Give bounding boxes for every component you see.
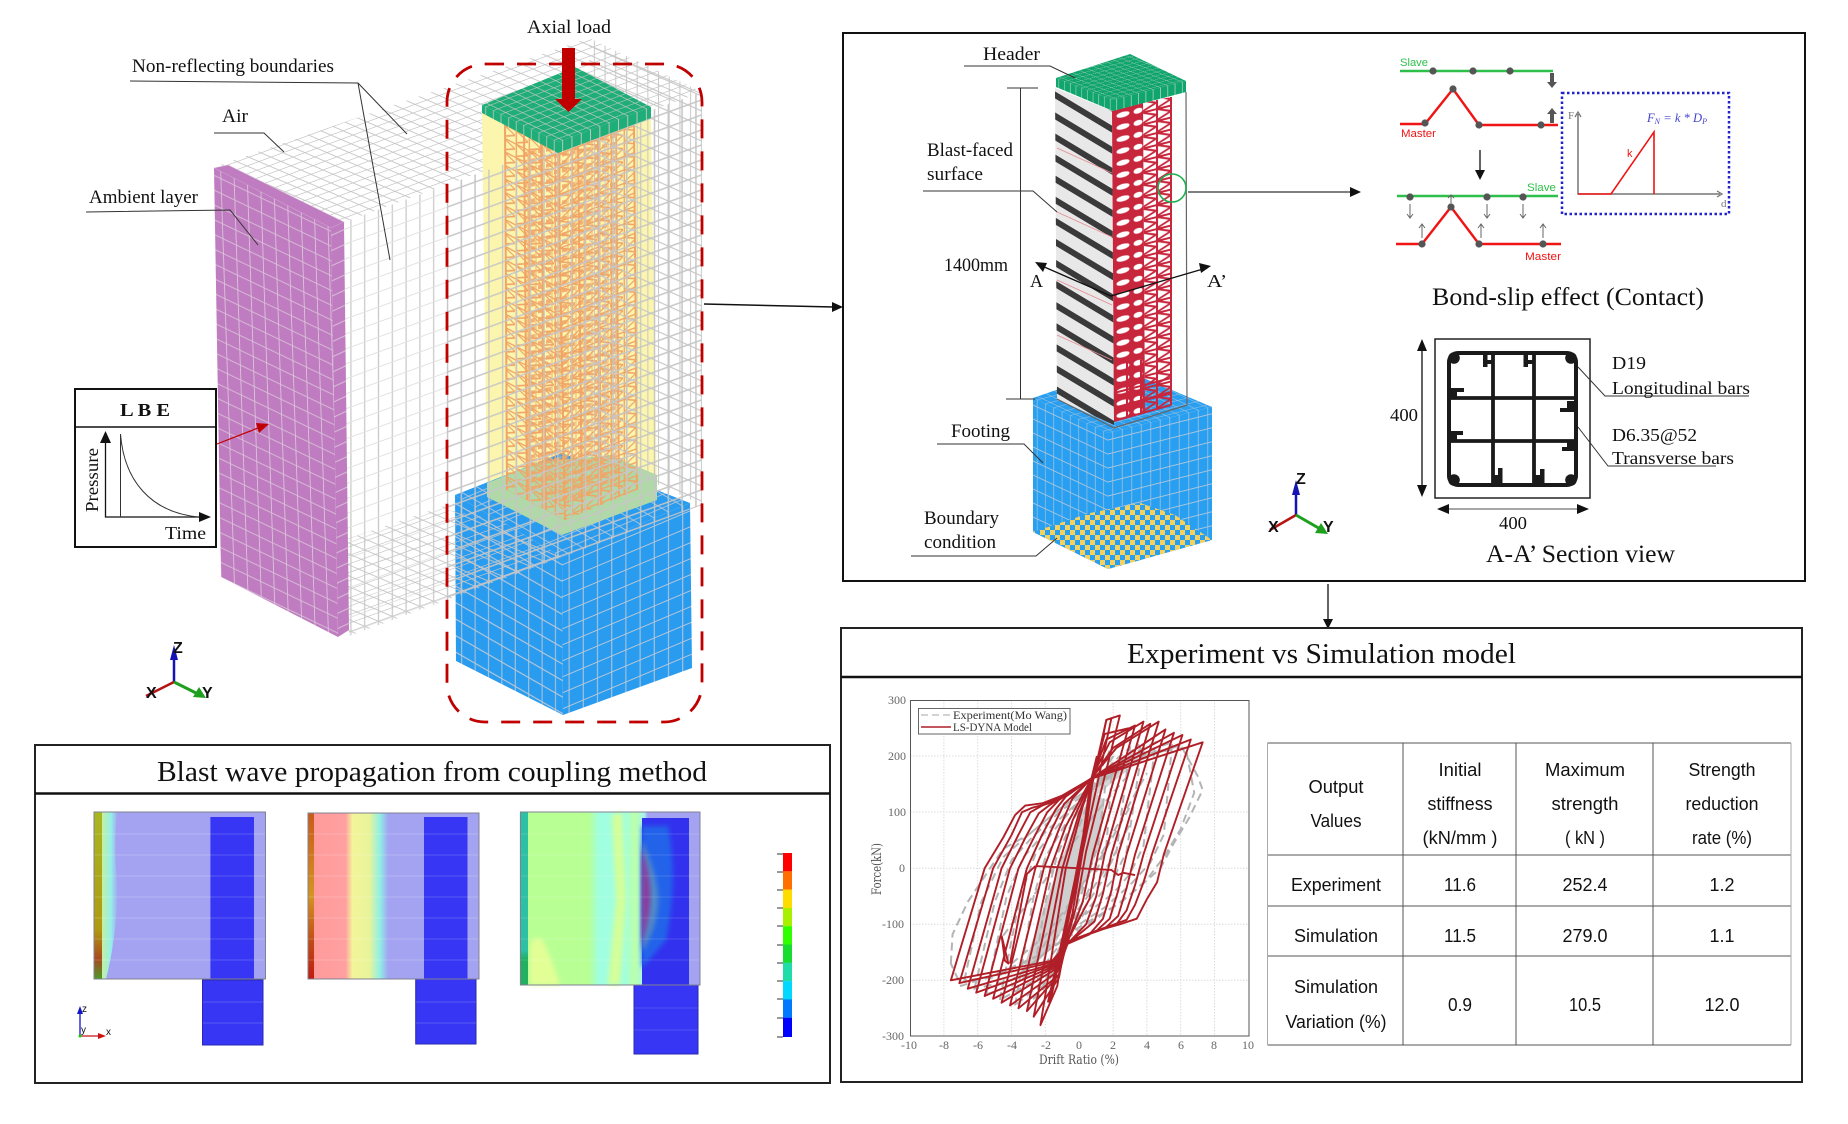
header: output values: Output xyxy=(1308,777,1364,797)
axis triad left xyxy=(146,640,213,702)
label: non-reflecting boundaries: Non-reflecting boundaries xyxy=(132,56,334,77)
heading: bond-slip effect: Bond-slip effect (Contact) xyxy=(1432,284,1704,311)
header: maximum strength: ( kN ) xyxy=(1565,828,1605,848)
slave and master in contact xyxy=(1396,182,1561,263)
legend xyxy=(918,708,1070,734)
label: non-reflecting boundaries xyxy=(130,56,407,260)
x tick labels: 10 xyxy=(1242,1038,1254,1052)
label: header: Header xyxy=(983,45,1040,65)
header: strength reduction rate: Strength xyxy=(1688,760,1756,780)
axis triad small: z xyxy=(82,1004,87,1015)
height dimension 1400mm: 1400mm xyxy=(944,256,1009,276)
hysteresis chart xyxy=(870,693,1254,1068)
boundary condition nodes xyxy=(1033,503,1212,569)
dimension 400 horizontal: 400 xyxy=(1499,513,1527,533)
row: simulation variation: Simulation xyxy=(1294,977,1378,997)
label: transverse bars xyxy=(1578,425,1734,468)
header: strength reduction rate: reduction xyxy=(1686,794,1758,814)
header: initial stiffness: stiffness xyxy=(1428,794,1492,814)
x tick labels: -2 xyxy=(1041,1038,1051,1052)
label: air xyxy=(214,106,284,152)
y tick labels: 300 xyxy=(888,693,906,707)
label: transverse bars: Transverse bars xyxy=(1612,448,1734,468)
dimension 400 vertical xyxy=(1390,339,1427,497)
x tick labels: -8 xyxy=(939,1038,949,1052)
row: experiment: 252.4 xyxy=(1562,875,1608,895)
axis triad xyxy=(1268,471,1334,536)
label: ambient layer xyxy=(86,187,258,245)
axis triad left: Y xyxy=(202,685,213,702)
axis title: drift ratio: Drift Ratio (%) xyxy=(1039,1053,1119,1068)
label: boundary condition: condition xyxy=(924,533,996,553)
axis triad small xyxy=(77,1004,111,1039)
panel: column detail xyxy=(843,33,1805,581)
arrow: down xyxy=(1475,150,1485,180)
row: simulation xyxy=(1294,926,1734,946)
heading: section view: A-A’ Section view xyxy=(1486,541,1675,568)
air mesh over column xyxy=(447,92,702,600)
y tick labels: -300 xyxy=(882,1029,904,1043)
label: longitudinal bars xyxy=(1578,353,1750,398)
label: air: Air xyxy=(222,106,249,127)
ambient layer xyxy=(214,165,349,637)
arrow: contact detail xyxy=(1188,187,1361,197)
header: maximum strength: strength xyxy=(1552,794,1618,814)
section cut arrows A-A' xyxy=(1030,262,1227,296)
arrow: detail to comparison panel xyxy=(1323,584,1333,629)
simulation frame 2 xyxy=(308,813,479,1044)
axis title: force: Force(kN) xyxy=(870,843,885,895)
label: longitudinal bars: D19 xyxy=(1612,353,1646,373)
header: maximum strength xyxy=(1545,760,1625,848)
column base over footing xyxy=(487,455,657,535)
row: experiment xyxy=(1291,875,1734,895)
panel: blast wave propagation xyxy=(35,745,830,1083)
x tick labels: -4 xyxy=(1007,1038,1017,1052)
label: header xyxy=(964,45,1075,78)
footing right face xyxy=(562,503,692,715)
force-penetration graph: N xyxy=(1654,117,1661,126)
simulation curve xyxy=(951,715,1203,1025)
y tick labels: 0 xyxy=(899,861,905,875)
axis triad left: X xyxy=(146,685,157,702)
axis triad small: x xyxy=(106,1027,111,1038)
row: experiment: 11.6 xyxy=(1444,875,1476,895)
grid xyxy=(910,700,1249,1036)
force-penetration graph: k xyxy=(1627,148,1633,160)
row: simulation variation xyxy=(1286,977,1740,1032)
panel: full-scale air-coupled model xyxy=(75,17,702,722)
force-penetration graph: F xyxy=(1647,111,1655,125)
x tick labels: 6 xyxy=(1178,1038,1184,1052)
header: maximum strength: Maximum xyxy=(1545,760,1625,780)
column rebar side xyxy=(1112,97,1171,421)
row: simulation variation: Variation (%) xyxy=(1286,1012,1386,1032)
slave and master in contact: Master xyxy=(1525,251,1561,263)
label: ambient layer: Ambient layer xyxy=(89,187,199,208)
row: simulation: Simulation xyxy=(1294,926,1378,946)
red dashed selection box xyxy=(447,64,702,722)
x tick labels: -6 xyxy=(973,1038,983,1052)
air mesh bottom over footing xyxy=(447,510,562,600)
rebar cage xyxy=(505,122,637,520)
label: boundary condition xyxy=(911,509,1057,556)
x tick labels: 0 xyxy=(1076,1038,1082,1052)
panel: experiment vs simulation xyxy=(841,628,1802,1082)
bond-slip contact diagram xyxy=(1396,57,1729,263)
simulation frame 3 xyxy=(520,812,700,1054)
arrow: model to detail panel xyxy=(704,302,843,312)
slave and master in contact: Slave xyxy=(1527,182,1556,194)
air mesh end cap xyxy=(589,38,702,505)
air mesh side face xyxy=(344,92,702,636)
header: output values xyxy=(1308,777,1364,831)
label: blast-faced surface: surface xyxy=(927,165,983,185)
y tick labels xyxy=(882,693,906,1043)
force-penetration graph: F xyxy=(1568,110,1574,122)
label: transverse bars: D6.35@52 xyxy=(1612,425,1697,445)
air mesh bottom face xyxy=(344,505,447,636)
axis triad: Y xyxy=(1323,519,1334,536)
axis triad: X xyxy=(1268,519,1279,536)
legend: Experiment(Mo Wang) xyxy=(953,710,1067,722)
slave and master before contact xyxy=(1400,57,1558,140)
colour legend xyxy=(777,853,792,1037)
row: simulation variation: 10.5 xyxy=(1569,995,1601,1015)
header: strength reduction rate xyxy=(1686,760,1758,848)
slave and master before contact: Slave xyxy=(1400,57,1428,69)
slave and master before contact: Master xyxy=(1401,128,1436,140)
arrow: axial load xyxy=(555,48,582,112)
footing left face xyxy=(455,495,563,715)
footing xyxy=(1033,368,1212,569)
y tick labels: 100 xyxy=(888,805,906,819)
header: strength reduction rate: rate (%) xyxy=(1692,828,1752,848)
header block xyxy=(482,67,651,153)
LBE pressure-time box: L B E xyxy=(120,400,170,420)
label: axial load: Axial load xyxy=(527,17,612,38)
footing top xyxy=(455,453,690,557)
header block xyxy=(1056,54,1186,111)
LBE pressure-time box: Pressure xyxy=(82,448,102,512)
dimension 400 vertical: 400 xyxy=(1390,405,1418,425)
heading: Experiment vs Simulation model xyxy=(1127,638,1516,670)
header: initial stiffness: Initial xyxy=(1438,760,1482,780)
LBE pressure-time box: Time xyxy=(165,523,206,543)
experiment curve xyxy=(951,742,1203,1006)
row: simulation: 279.0 xyxy=(1562,926,1608,946)
axis triad left: Z xyxy=(173,640,183,657)
row: simulation: 11.5 xyxy=(1444,926,1476,946)
height dimension 1400mm xyxy=(944,88,1038,399)
header: initial stiffness xyxy=(1422,760,1498,848)
heading: Blast wave propagation from coupling method xyxy=(157,756,707,788)
A-A' cross section xyxy=(1390,339,1750,533)
force-penetration graph: = k * D xyxy=(1660,111,1702,125)
row: simulation: 1.1 xyxy=(1710,926,1734,946)
x tick labels xyxy=(901,1038,1254,1052)
x tick labels: -10 xyxy=(901,1038,917,1052)
column blast-faced side xyxy=(1055,88,1114,425)
column outline xyxy=(1057,92,1187,428)
row: experiment: 1.2 xyxy=(1710,875,1734,895)
row: simulation variation: 0.9 xyxy=(1448,995,1472,1015)
y tick labels: -200 xyxy=(882,973,904,987)
section cut arrows A-A': A xyxy=(1030,271,1043,291)
axes box xyxy=(910,700,1249,1036)
label: longitudinal bars: Longitudinal bars xyxy=(1612,378,1750,398)
air mesh top face xyxy=(214,38,702,222)
column concrete xyxy=(482,113,657,533)
results table xyxy=(1268,743,1791,1045)
axis triad: Z xyxy=(1296,471,1306,488)
label: blast-faced surface xyxy=(923,141,1057,212)
force-penetration graph: P xyxy=(1701,117,1707,126)
header: output values: Values xyxy=(1310,811,1362,831)
section cut arrows A-A': A’ xyxy=(1207,271,1227,291)
legend: LS-DYNA Model xyxy=(953,722,1032,734)
label: footing xyxy=(937,422,1043,463)
LBE pressure-time box xyxy=(75,389,216,547)
dimension 400 horizontal xyxy=(1437,504,1589,533)
force-penetration graph xyxy=(1562,93,1729,214)
x tick labels: 2 xyxy=(1110,1038,1116,1052)
y tick labels: -100 xyxy=(882,917,904,931)
y tick labels: 200 xyxy=(888,749,906,763)
x tick labels: 8 xyxy=(1211,1038,1217,1052)
contact callout circle xyxy=(1158,174,1186,202)
row: simulation variation: 12.0 xyxy=(1704,995,1740,1015)
label: footing: Footing xyxy=(951,422,1010,442)
axis triad small: y xyxy=(81,1025,86,1036)
header: initial stiffness: (kN/mm ) xyxy=(1422,828,1498,848)
arrow: blast load xyxy=(217,423,269,444)
simulation frame 1 xyxy=(94,812,266,1045)
x tick labels: 4 xyxy=(1144,1038,1150,1052)
force-penetration graph: d xyxy=(1721,198,1727,210)
label: blast-faced surface: Blast-faced xyxy=(927,141,1014,161)
row: experiment: Experiment xyxy=(1291,875,1381,895)
label: boundary condition: Boundary xyxy=(924,509,1000,529)
